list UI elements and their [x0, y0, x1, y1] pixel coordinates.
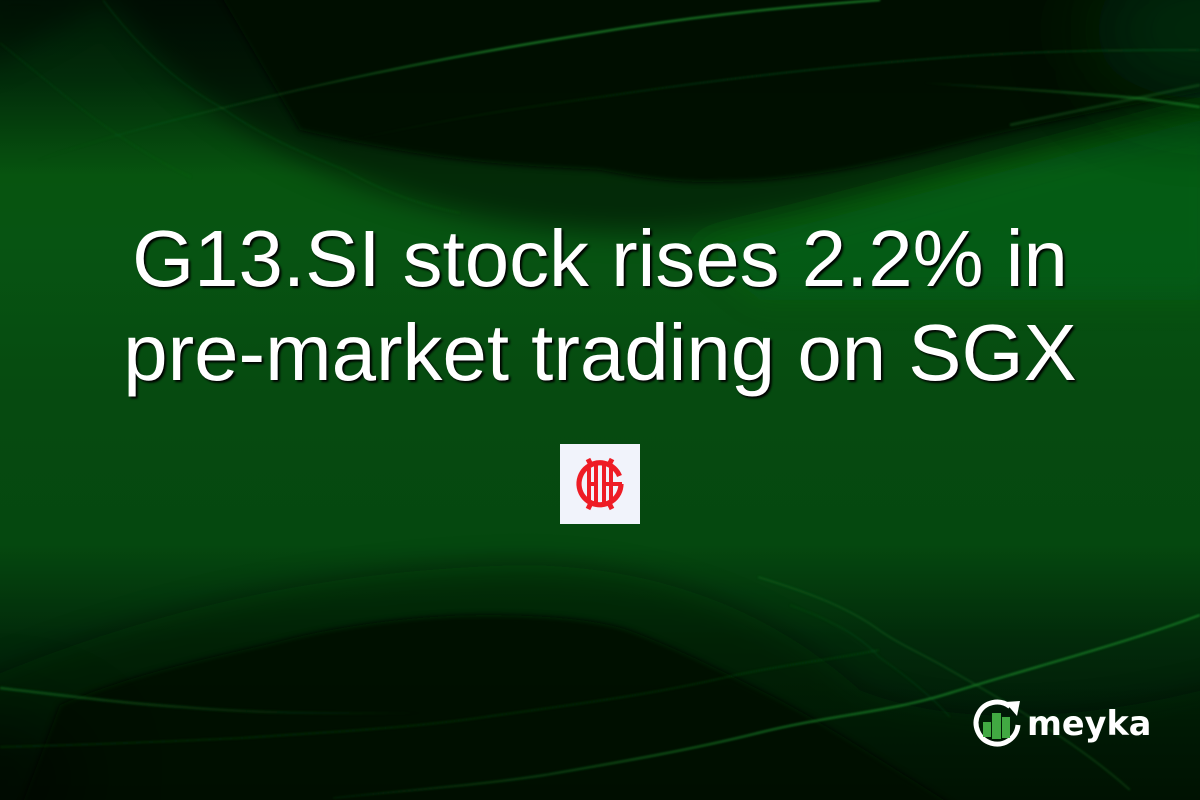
icon: company logo: [560, 444, 640, 524]
soften the dark shapes at their outer ends: [1090, 0, 1200, 100]
title: pre-market trading on SGX: [123, 308, 1077, 397]
wordmark: meyka: [1027, 704, 1151, 743]
title: G13.SI stock rises 2.2% in: [132, 214, 1068, 303]
brand: meyka logo: [973, 700, 1151, 747]
icon: meyka circular arrow with bars: [973, 700, 1020, 747]
title: [123, 214, 1078, 400]
